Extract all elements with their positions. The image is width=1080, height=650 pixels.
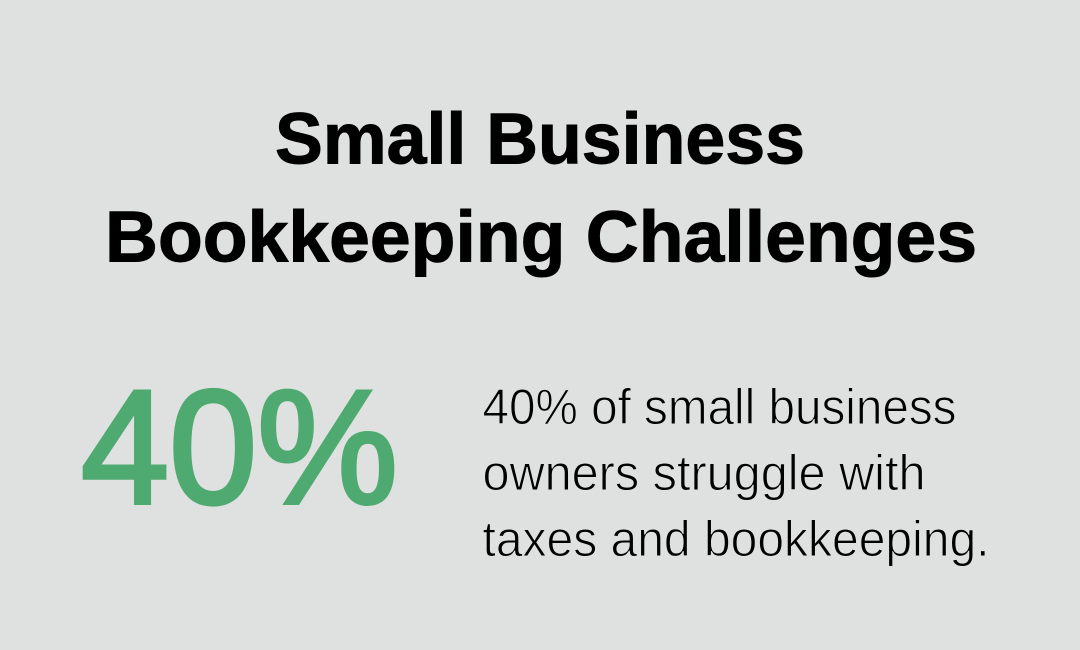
description text: 40% of small business bbox=[482, 379, 956, 435]
description text: owners struggle with bbox=[482, 445, 926, 501]
description text: taxes and bookkeeping. bbox=[482, 511, 990, 567]
big statistic: 40%: 40% bbox=[81, 357, 398, 538]
title: Small Business bbox=[275, 100, 805, 180]
description text bbox=[482, 379, 990, 567]
title: Bookkeeping Challenges bbox=[105, 198, 977, 278]
title bbox=[105, 100, 977, 278]
